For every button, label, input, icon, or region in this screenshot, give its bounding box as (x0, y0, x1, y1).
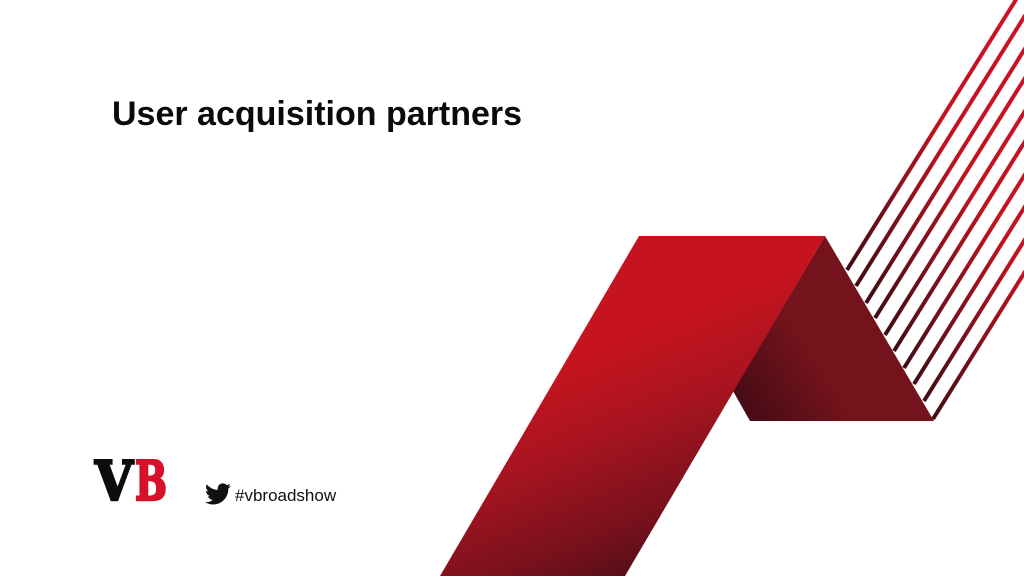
hashtag: #vbroadshow (235, 486, 336, 505)
title: User acquisition partners (112, 95, 522, 133)
icon: twitter bird (205, 483, 231, 504)
VB logo: B (135, 449, 167, 513)
red ribbon (440, 236, 825, 576)
diagonal stripes (847, 0, 1024, 419)
fold triangle (733, 236, 934, 421)
VB logo (94, 449, 167, 513)
VB logo: V (94, 449, 134, 513)
